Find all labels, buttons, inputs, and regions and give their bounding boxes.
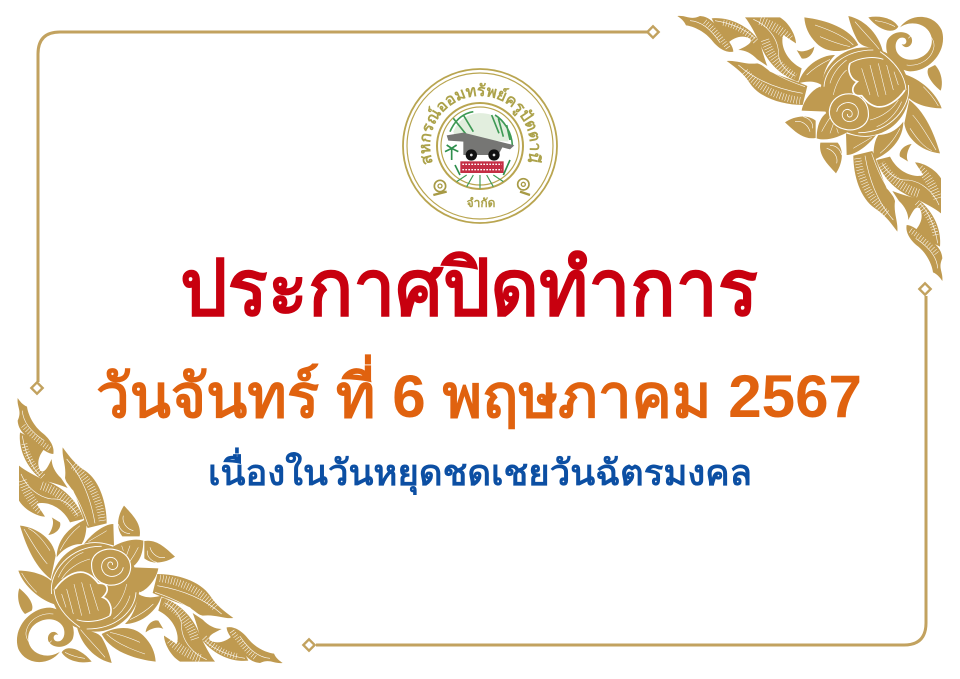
logo: suffix: จำกัด bbox=[467, 196, 496, 210]
title: ประกาศปิดทำการ bbox=[180, 244, 758, 332]
logo: cooperative seal bbox=[402, 68, 558, 224]
logo: curved name bbox=[430, 96, 530, 163]
logo: cooperative seal: สหกรณ์ออมทรัพย์ครูปัตตานี bbox=[420, 82, 542, 165]
logo: scene bbox=[433, 112, 530, 195]
corner ornament: bottom left bbox=[17, 398, 283, 663]
corner ornament: top right bbox=[677, 16, 943, 281]
date line: วันจันทร์ ที่ 6 พฤษภาคม 2567 bbox=[96, 354, 862, 430]
reason line: เนื่องในวันหยุดชดเชยวันฉัตรมงคล bbox=[208, 447, 752, 496]
